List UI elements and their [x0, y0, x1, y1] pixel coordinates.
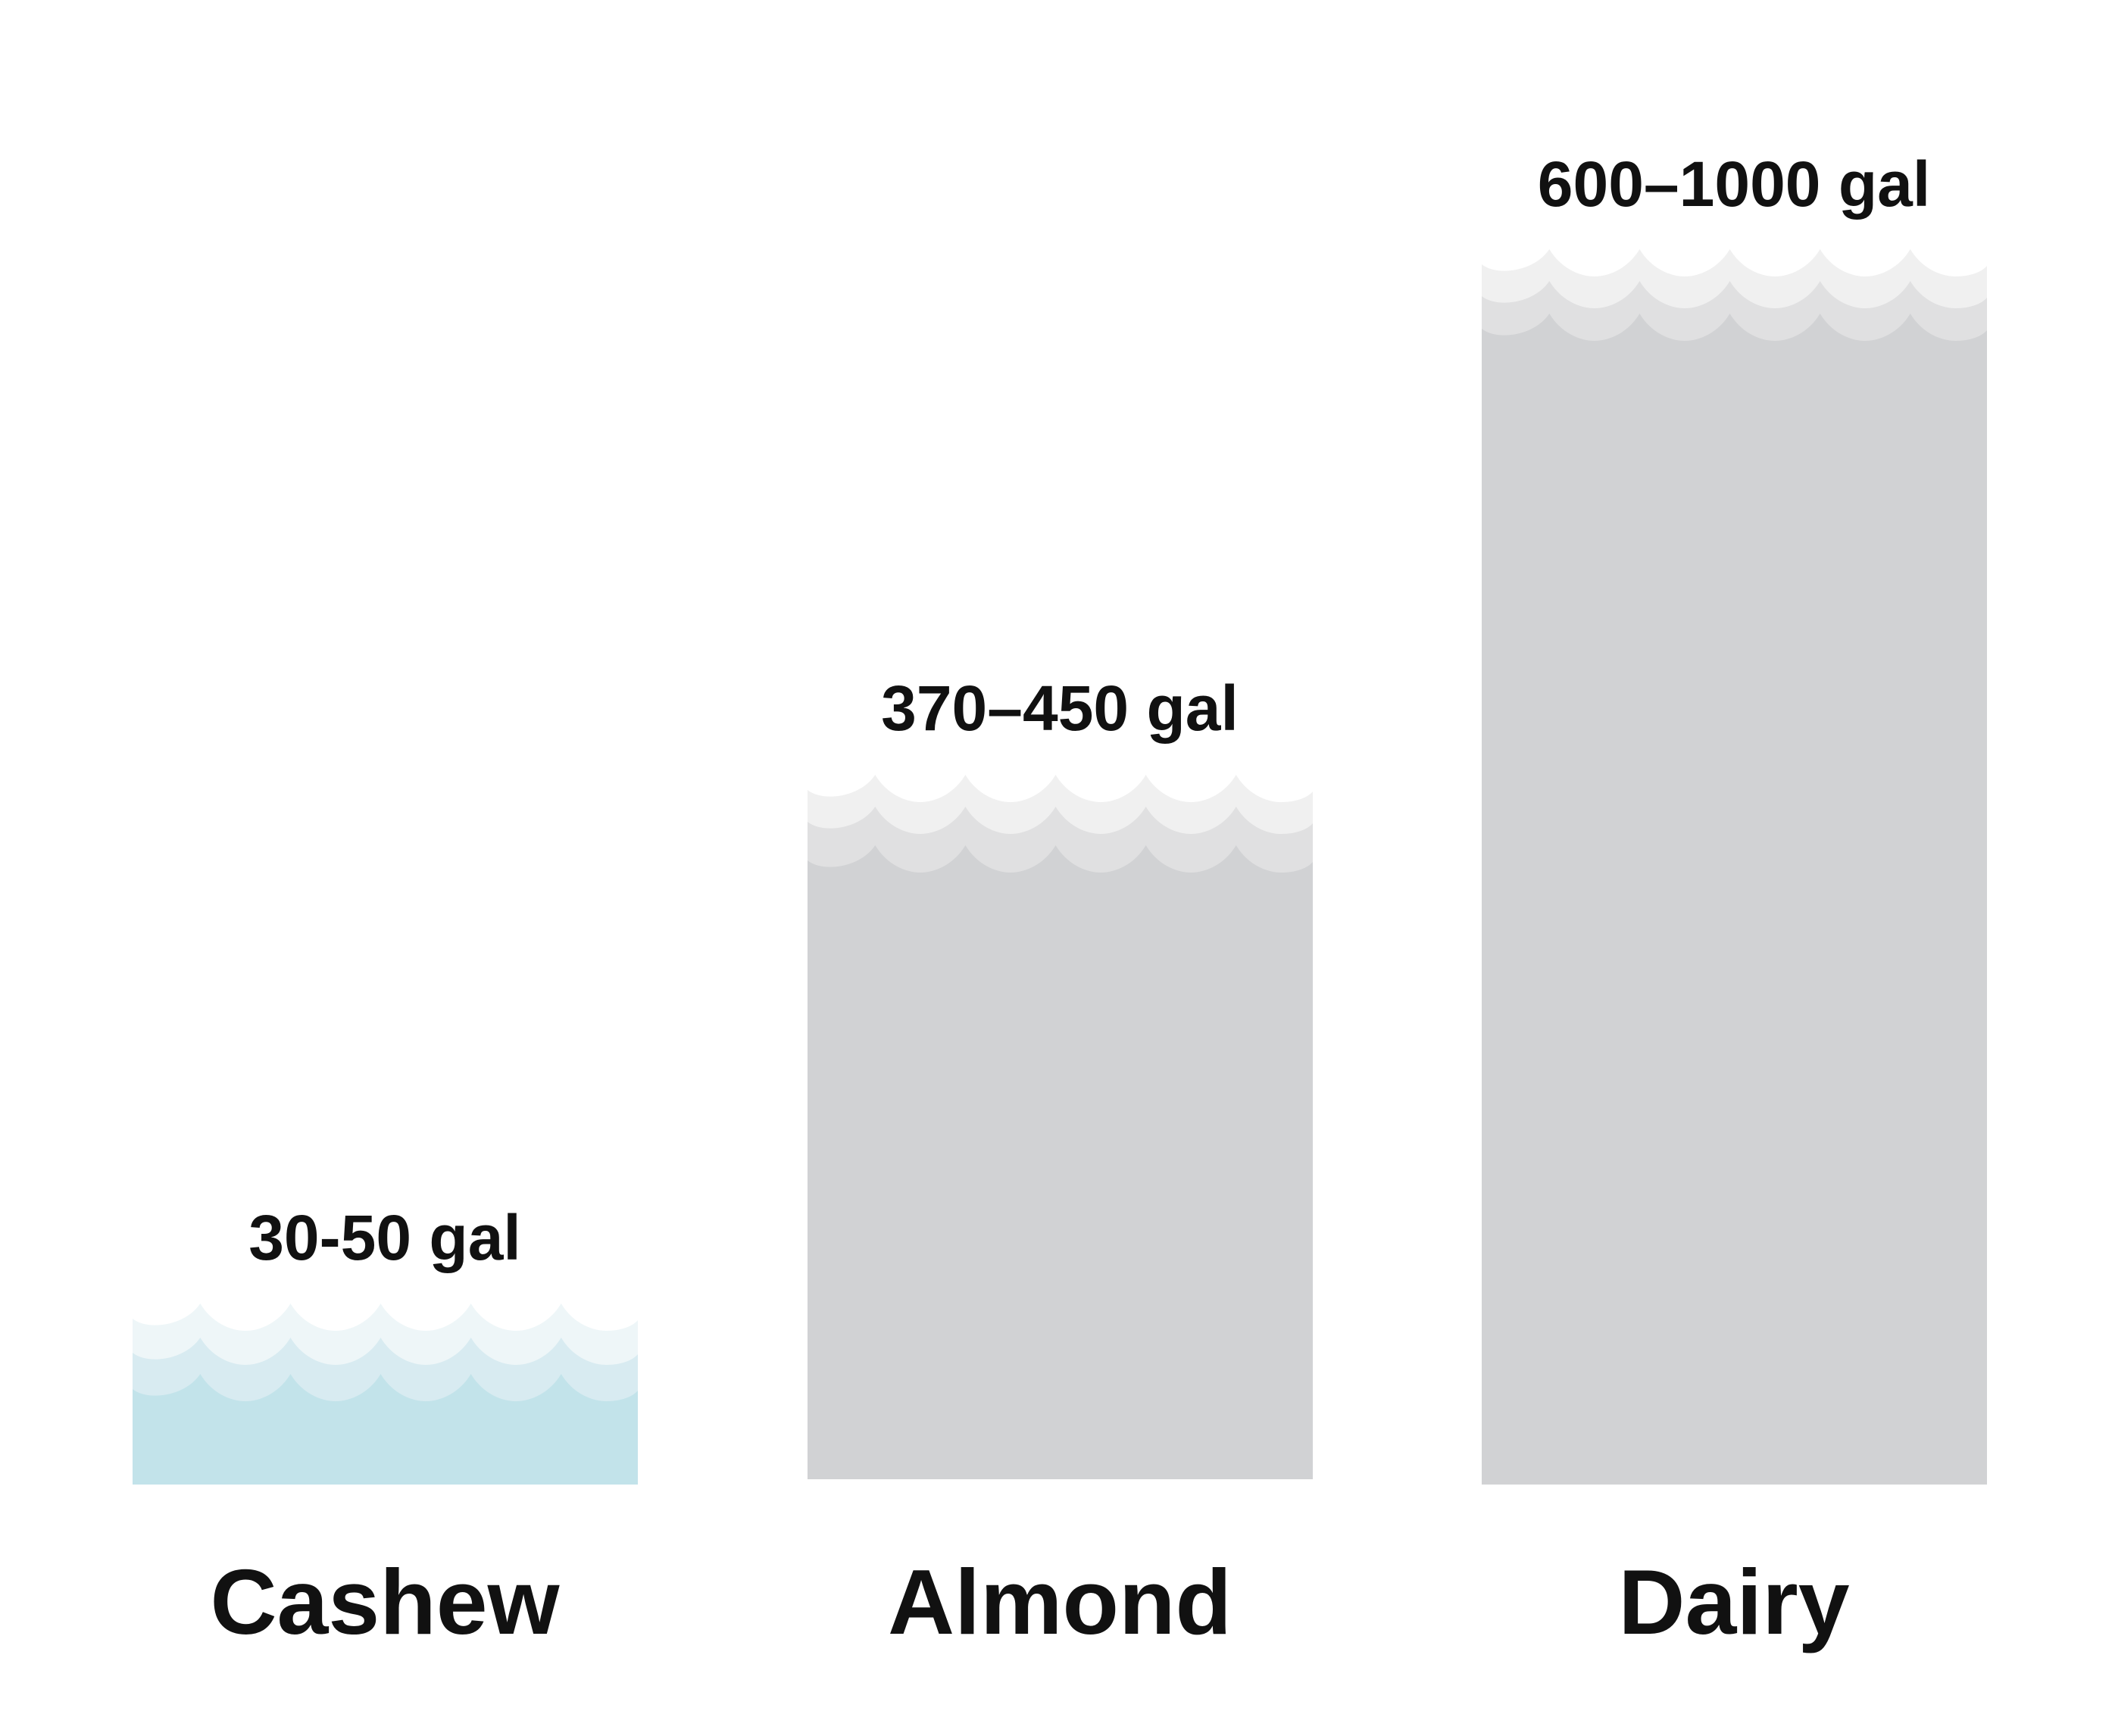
label: almond: Almond: [888, 1550, 1232, 1653]
bar: dairy water: [1482, 249, 1987, 1485]
value: dairy: 600–1000 gal: [1538, 148, 1930, 220]
label: dairy: Dairy: [1618, 1550, 1850, 1653]
value: cashew: 30-50 gal: [248, 1202, 521, 1273]
value: almond: 370–450 gal: [881, 673, 1239, 744]
bar: cashew water: [133, 1304, 638, 1485]
bar: almond water: [808, 775, 1313, 1479]
label: cashew: Cashew: [210, 1550, 560, 1653]
